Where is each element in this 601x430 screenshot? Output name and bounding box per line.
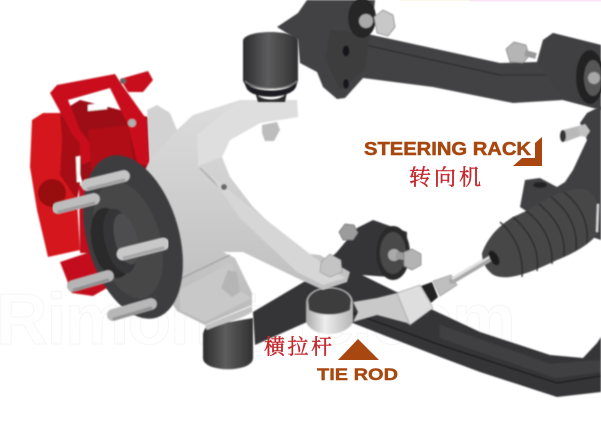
rear bushing with bolt bbox=[506, 33, 601, 110]
stud 3 bbox=[123, 244, 163, 258]
front bushing bolt bbox=[348, 0, 395, 38]
label: tie rod bbox=[264, 331, 398, 384]
silver steering knuckle bbox=[140, 100, 350, 325]
lower left ball joint bbox=[203, 306, 253, 369]
wheel hub flange bbox=[66, 144, 200, 330]
stud 4 bbox=[73, 276, 108, 290]
stud 1 bbox=[87, 176, 124, 189]
label: tie rod: TIE ROD bbox=[317, 365, 398, 384]
tie rod end joint bbox=[306, 287, 353, 334]
label: steering rack: STEERING RACK bbox=[364, 139, 531, 159]
label: steering rack bbox=[364, 137, 542, 192]
arrow: tie rod triangle bbox=[338, 339, 379, 360]
steering rack housing bbox=[482, 106, 601, 277]
lower control arm bbox=[253, 220, 601, 397]
upper ball joint bbox=[243, 32, 298, 102]
wheel studs bbox=[58, 176, 163, 319]
hydraulic fitting bbox=[560, 124, 590, 142]
stud 5 bbox=[113, 304, 151, 319]
stud 2 bbox=[58, 199, 94, 212]
lower arm rear bushing bbox=[339, 224, 421, 280]
tie rod link bbox=[353, 249, 501, 325]
red brake caliper bbox=[30, 71, 153, 296]
label: steering rack: 转向机 bbox=[409, 161, 481, 192]
label: tie rod: 横拉杆 bbox=[264, 331, 332, 361]
top edge colour strip bbox=[400, 0, 601, 2]
rubber bellows boot bbox=[482, 189, 599, 277]
upper control arm bbox=[277, 0, 601, 110]
watermark: RimonTyre.com bbox=[0, 280, 516, 360]
arrow: steering rack corner bbox=[513, 137, 542, 166]
knuckle bolts bbox=[221, 122, 342, 297]
inner tie rod shaft bbox=[452, 258, 491, 281]
